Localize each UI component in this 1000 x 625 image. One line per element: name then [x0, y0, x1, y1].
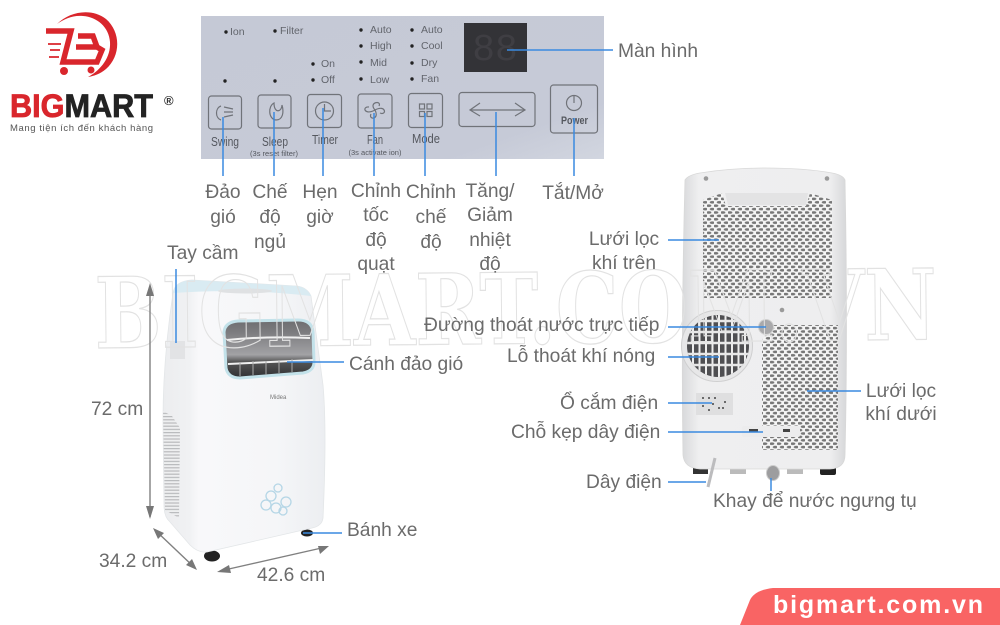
panel indicator labels: Cool: [421, 40, 443, 52]
panel indicator labels: High: [370, 40, 392, 52]
button labels: Mode: [412, 132, 440, 146]
hot air outlet: [682, 310, 752, 382]
labels: control functions: độ: [259, 207, 281, 228]
labels: front unit: Tay cầm: [167, 243, 238, 264]
labels: control functions: Màn hình: [618, 41, 698, 62]
labels: front unit: [91, 243, 463, 586]
brand mark: Midea: [270, 395, 287, 401]
button labels: (3s reset filter): [250, 149, 298, 158]
cord clip: [742, 426, 800, 437]
front decoration: [261, 484, 291, 515]
labels: back unit: Khay để nước ngưng tụ: [713, 491, 917, 512]
icon: shopping cart: [46, 12, 117, 77]
labels: control functions: nhiệt: [469, 230, 511, 251]
labels: back unit: Dây điện: [586, 472, 662, 493]
panel indicator labels: Auto: [421, 24, 443, 36]
drain tray: [766, 466, 780, 480]
button labels: Swing: [211, 135, 239, 149]
button labels: (3s activate ion): [349, 148, 402, 157]
body: [682, 168, 846, 469]
labels: front unit: 72 cm: [91, 399, 143, 420]
panel indicator labels: [223, 24, 443, 86]
back unit: [682, 168, 846, 487]
lower filter grille: [762, 325, 838, 450]
panel indicator labels: Ion: [230, 26, 245, 38]
banner: website: [740, 588, 1000, 625]
labels: back unit: Lưới lọc: [589, 229, 660, 250]
labels: back unit: khí trên: [592, 253, 656, 274]
labels: control functions: ngủ: [254, 232, 286, 253]
panel indicator labels: Auto: [370, 24, 392, 36]
labels: back unit: [424, 229, 937, 512]
display: [464, 23, 527, 72]
panel indicator labels: Filter: [280, 25, 304, 37]
labels: back unit: Chỗ kẹp dây điện: [511, 421, 660, 443]
labels: control functions: độ: [420, 232, 442, 253]
labels: back unit: Đường thoát nước trực tiếp: [424, 315, 659, 336]
unit top edge: [173, 280, 311, 296]
labels: control functions: độ: [365, 230, 387, 251]
unit body: [163, 280, 325, 552]
labels: control functions: tốc: [363, 205, 389, 226]
panel indicator labels: Off: [321, 74, 335, 86]
panel indicator labels: Dry: [421, 57, 438, 69]
labels: front unit: Cánh đảo gió: [349, 354, 463, 375]
button labels: Sleep: [262, 135, 288, 149]
labels: front unit: 42.6 cm: [257, 565, 325, 586]
labels: front unit: 34.2 cm: [99, 551, 167, 572]
upper handle recess: [725, 193, 808, 205]
panel indicator labels: Mid: [370, 57, 387, 69]
air vent: [224, 320, 314, 378]
labels: control functions: giờ: [306, 207, 334, 228]
button labels: Timer: [312, 133, 338, 147]
panel indicator labels: Fan: [421, 73, 439, 85]
panel indicator labels: Low: [370, 74, 390, 86]
labels: control functions: Giảm: [467, 205, 513, 226]
labels: control functions: Đảo: [205, 182, 241, 203]
labels: control functions: [205, 41, 698, 275]
wheels and feet: [693, 464, 836, 475]
labels: control functions: Tăng/: [465, 181, 515, 202]
labels: control functions: Hẹn: [302, 182, 338, 203]
dimension arrows: [146, 283, 329, 573]
labels: control functions: Tắt/Mở: [542, 182, 604, 204]
labels: control functions: chế: [416, 207, 447, 228]
labels: control functions: độ: [479, 254, 501, 275]
top screws: [704, 176, 829, 312]
labels: back unit: Lưới lọc: [866, 381, 937, 402]
labels: control functions: gió: [210, 207, 236, 228]
labels: control functions: Chỉnh: [406, 182, 456, 203]
labels: control functions: quạt: [357, 254, 395, 275]
button labels: Power: [561, 115, 589, 127]
panel: control panel: [201, 16, 604, 159]
display: 88: [472, 29, 518, 72]
handle recess: [170, 341, 185, 359]
drain knob: [758, 320, 774, 334]
labels: back unit: Lỗ thoát khí nóng: [507, 345, 655, 367]
logo tagline: Mang tiện ích đến khách hàng: [10, 123, 153, 134]
labels: control functions: Chế: [252, 182, 288, 203]
wheels: [204, 530, 313, 562]
button labels: Fan: [367, 133, 383, 147]
callout lines: [176, 50, 861, 533]
upper filter grille: [703, 193, 832, 298]
registered mark: ®: [164, 93, 174, 108]
logo wordmark: BIGMART: [10, 88, 153, 124]
labels: front unit: Bánh xe: [347, 520, 417, 541]
labels: back unit: Ổ cắm điện: [560, 392, 658, 414]
side grille: [163, 411, 180, 518]
button labels: [211, 115, 589, 158]
labels: control functions: Chỉnh: [351, 181, 401, 202]
buttons: [208, 85, 598, 133]
panel indicator labels: On: [321, 58, 335, 70]
logo: Bigmart: [10, 12, 174, 134]
banner: website: bigmart.com.vn: [773, 591, 983, 619]
power socket panel: [696, 393, 733, 415]
labels: back unit: khí dưới: [865, 404, 937, 425]
front unit: [163, 280, 325, 562]
power cord: [708, 458, 715, 487]
